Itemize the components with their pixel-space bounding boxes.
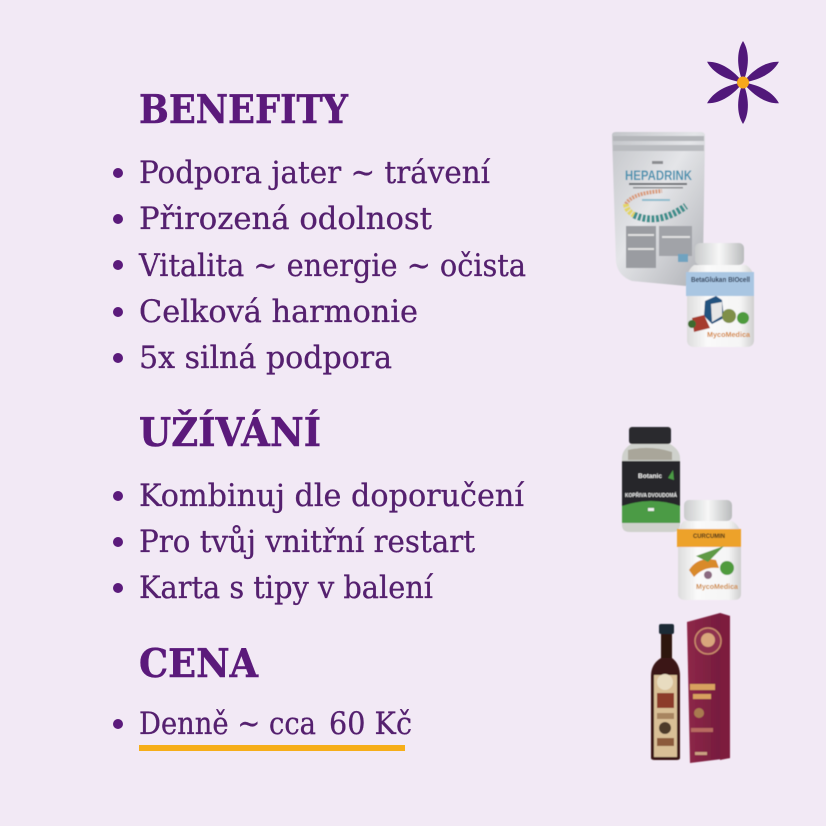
list: usage: Pro tvůj vnitřní restart [139, 524, 476, 560]
list: usage: Kombinuj dle doporučení [139, 478, 525, 514]
product: Botanic nettle bottle: Botanic [638, 473, 662, 480]
product: Botanic nettle bottle: KOPŘIVA DVOUDOMÁ [625, 491, 677, 499]
product: Curcumin bottle: MycoMedica [696, 582, 739, 591]
product: BetaGlukan bottle: BetaGlukan BIOcell [691, 275, 750, 284]
product: BetaGlukan bottle [686, 243, 754, 347]
list: benefits: Vitalita ~ energie ~ očista [138, 248, 526, 284]
price line: 60 Kč [329, 706, 412, 742]
price line [113, 706, 412, 751]
list: usage [113, 478, 525, 606]
product: Hepadrink pouch [612, 132, 705, 286]
heading: uzivani: UŽÍVÁNÍ [139, 409, 321, 456]
product: elixir bottle [651, 624, 680, 760]
list: benefits: Celková harmonie [139, 294, 418, 330]
product: Botanic nettle bottle [622, 427, 680, 532]
heading: cena: CENA [139, 641, 259, 687]
price line: Denně ~ cca [139, 706, 316, 742]
product: Hepadrink pouch: HEPADRINK [625, 167, 692, 183]
product: Curcumin bottle: CURCUMIN [693, 533, 725, 540]
list: benefits [113, 155, 526, 376]
product: Curcumin bottle [677, 500, 741, 600]
list: benefits: Podpora jater ~ trávení [139, 155, 491, 191]
product: elixir box [687, 613, 730, 763]
icon: flower [705, 41, 781, 124]
heading: benefity: BENEFITY [139, 87, 349, 133]
list: benefits: Přirozená odolnost [139, 201, 433, 237]
list: usage: Karta s tipy v balení [139, 570, 434, 606]
list: benefits: 5x silná podpora [139, 340, 392, 376]
product: BetaGlukan bottle: MycoMedica [707, 330, 751, 339]
